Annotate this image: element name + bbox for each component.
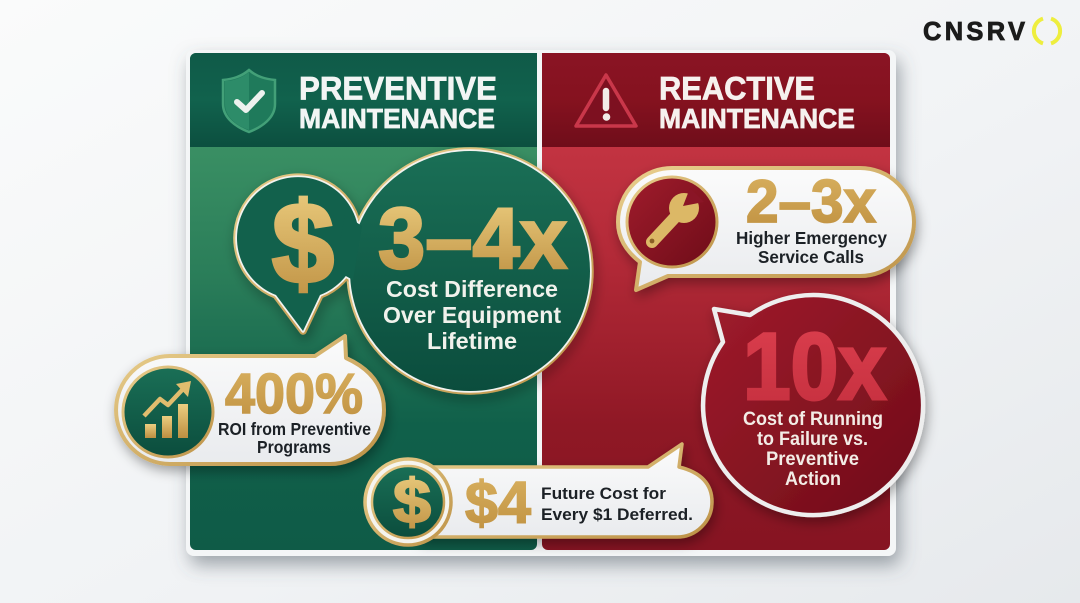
stat: 2-3x: 2–3x	[746, 168, 876, 235]
logo: CNSRV: CNSRV	[923, 18, 1025, 46]
heading: reactive maintenance	[659, 70, 855, 134]
callout: 2-3x emergency calls	[618, 168, 914, 290]
label: emergency service calls: Higher Emergency	[736, 228, 887, 248]
heading: preventive maintenance: MAINTENANCE	[299, 103, 495, 134]
white card frame	[186, 50, 896, 556]
icon: shield with check	[223, 70, 275, 132]
label: emergency service calls: Service Calls	[758, 247, 864, 267]
label: cost of running	[743, 408, 883, 490]
stat: 400%: 400%	[225, 362, 363, 426]
panel header: reactive	[542, 53, 890, 147]
label: ROI from preventive programs: ROI from Preventive	[218, 419, 371, 439]
stat: 3-4x: 3–4x	[378, 191, 567, 287]
panel header: preventive	[190, 53, 537, 147]
callout: 3-4x cost difference with dollar bubble	[237, 151, 590, 391]
stat: 10x: 10x	[743, 314, 886, 420]
label: cost difference	[383, 276, 561, 354]
label: cost of running: Cost of Running	[743, 408, 883, 430]
label: future cost: Every $1 Deferred.	[541, 505, 693, 524]
label: cost difference: Lifetime	[427, 328, 517, 354]
label: cost of running: Preventive	[766, 448, 859, 470]
icon: dollar coin: $	[393, 468, 431, 537]
heading: reactive maintenance: MAINTENANCE	[659, 103, 855, 134]
heading: preventive maintenance: PREVENTIVE	[299, 70, 497, 106]
label: cost of running: to Failure vs.	[757, 428, 868, 450]
label: ROI from preventive programs: Programs	[257, 437, 331, 457]
label: cost of running: Action	[785, 468, 841, 490]
label: cost difference: Cost Difference	[386, 276, 558, 302]
label: ROI from preventive programs	[218, 419, 371, 457]
panel: reactive maintenance	[542, 53, 890, 550]
heading: reactive maintenance: REACTIVE	[659, 70, 815, 106]
icon: warning triangle	[576, 75, 636, 126]
callout: $4 future cost	[365, 444, 712, 545]
stat: $4: $4	[465, 470, 531, 536]
icon: dollar coin	[365, 459, 451, 545]
label: future cost: Future Cost for	[541, 484, 666, 503]
callout: 400% ROI	[116, 336, 384, 464]
icon: wrench	[627, 177, 717, 267]
label: future cost	[541, 484, 693, 524]
icon: dollar sign: $	[272, 180, 334, 308]
icon: growth chart	[123, 367, 213, 457]
label: cost difference: Over Equipment	[383, 302, 561, 328]
panel: preventive maintenance	[190, 53, 537, 550]
callout: 10x cost of running to failure	[703, 295, 923, 515]
icon: logo ring	[1034, 19, 1060, 43]
label: emergency service calls	[736, 228, 887, 267]
heading: preventive maintenance	[299, 70, 497, 134]
